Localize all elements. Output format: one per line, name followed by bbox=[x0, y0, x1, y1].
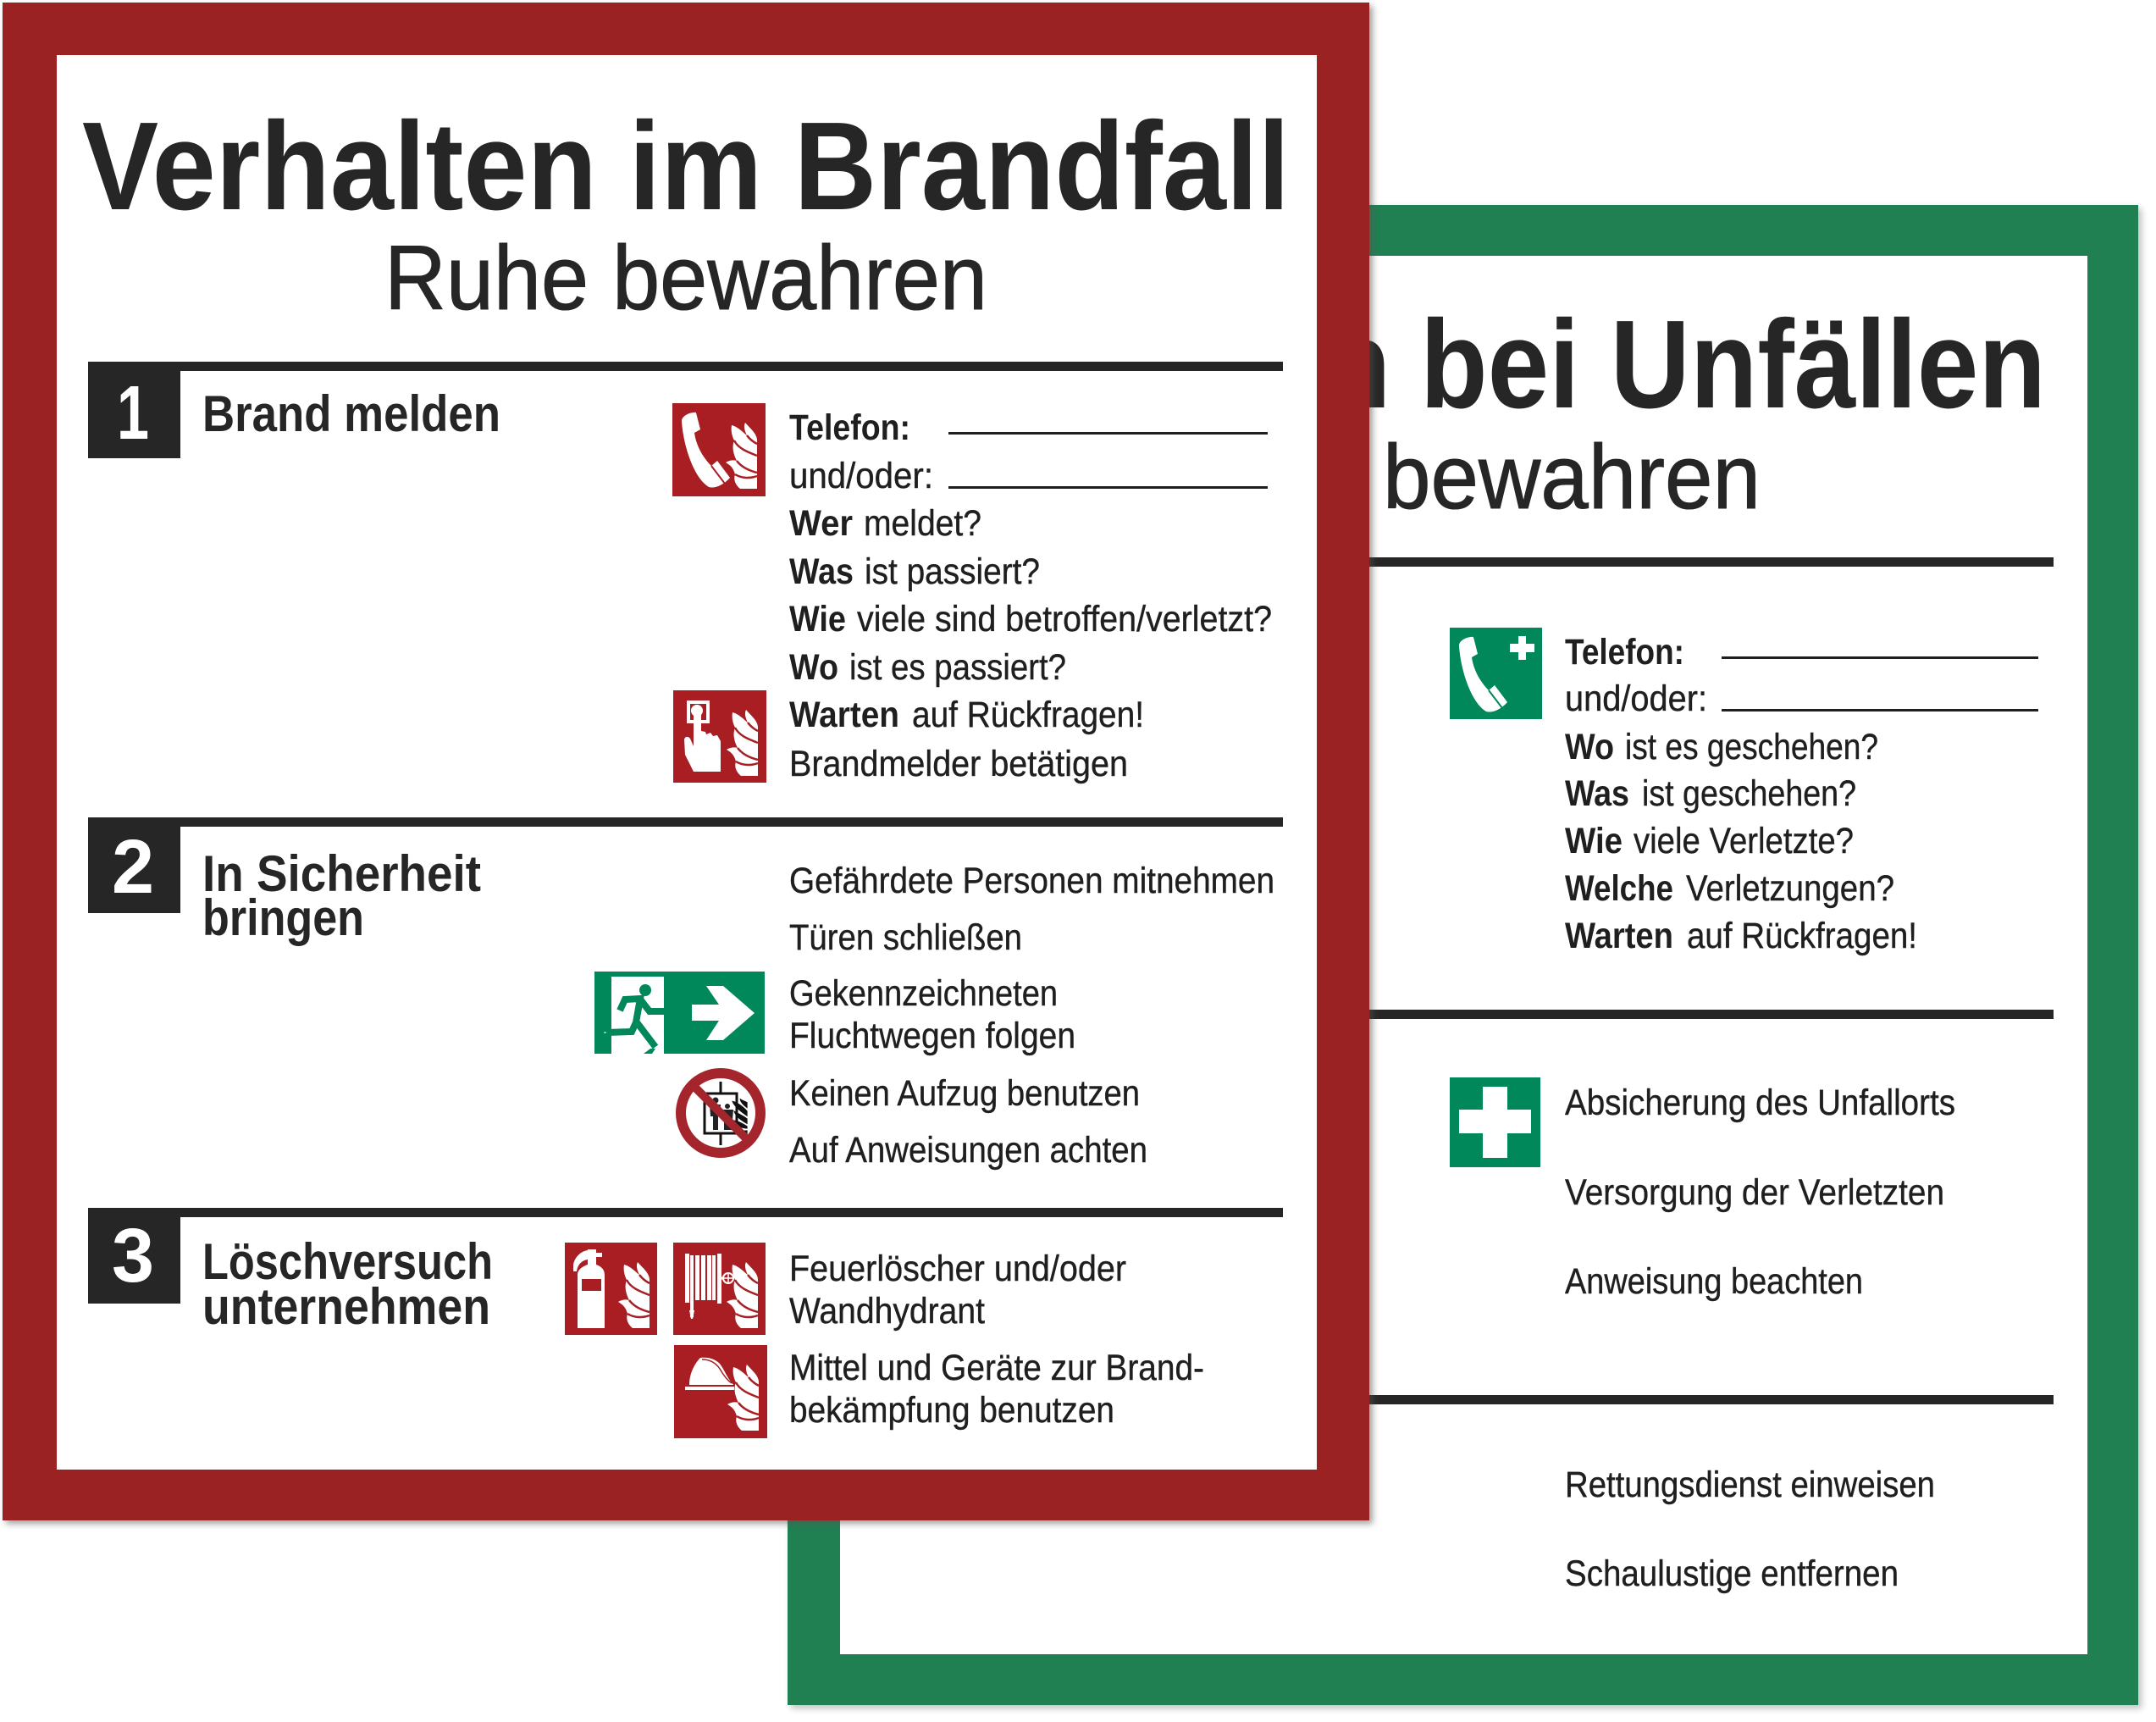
text: Rettungsdienst einweisen: Rettungsdienst einweisen bbox=[1565, 1465, 1935, 1505]
text: Was ist geschehen bbox=[1565, 773, 1856, 814]
number badge 3: 3 bbox=[112, 1214, 154, 1298]
section 2: In Sicherheit bringen bbox=[88, 817, 1283, 1171]
number badge 2 bbox=[88, 817, 180, 913]
heading: Löschversuch unternehmen: Löschversuch bbox=[202, 1233, 493, 1290]
text: Wie viele sind betroffen: Wie bbox=[789, 599, 846, 640]
number badge 2: 2 bbox=[112, 825, 154, 910]
text: Wie viele Verletzte: Wie bbox=[1565, 821, 1623, 861]
text: Gekennzeichneten Fluchtwegen folgen bbox=[789, 973, 1075, 1056]
icon: fire extinguisher bbox=[565, 1243, 657, 1335]
text: Telefon line: Telefon: bbox=[789, 407, 910, 448]
heading: In Sicherheit bringen: bringen bbox=[202, 889, 364, 946]
heading: Brand melden: Brand melden bbox=[202, 385, 500, 442]
icon: do not use lift in case of fire bbox=[681, 1073, 760, 1153]
text: Warten auf Rückfragen bbox=[1565, 916, 1917, 956]
text: Welche Verletzungen: Verletzungen? bbox=[1686, 868, 1894, 909]
text: Was ist geschehen: ist geschehen? bbox=[1642, 773, 1856, 814]
red panel: Verhalten im Brandfall bbox=[3, 3, 1373, 1524]
text: Türen schließen: Türen schließen bbox=[789, 917, 1022, 958]
text: Was ist passiert: ist passiert? bbox=[865, 551, 1040, 592]
text: Wer meldet: meldet? bbox=[864, 503, 981, 544]
text: Brandmelder betätigen: Brandmelder betätigen bbox=[789, 744, 1128, 784]
subtitle: Ruhe bewahren bbox=[384, 226, 987, 329]
text: und/oder line: und/oder: bbox=[1565, 678, 1707, 719]
text: Was ist passiert: Was bbox=[789, 551, 854, 592]
text: Wer meldet: Wer bbox=[789, 503, 853, 544]
text: Wo ist es passiert: Wo bbox=[789, 647, 838, 688]
text: Warten auf Rückfragen: Warten bbox=[1565, 916, 1673, 956]
text: Feuerlöscher und/oder Wandhydrant: Wandhydrant bbox=[789, 1291, 985, 1332]
text: Telefon line: Telefon: bbox=[1565, 632, 1684, 673]
icon: emergency telephone bbox=[1450, 628, 1542, 719]
text: Feuerlöscher und/oder Wandhydrant bbox=[789, 1249, 1126, 1332]
green panel title: bei Unfällen bbox=[1420, 295, 2046, 435]
icon: fire fighting equipment helmet bbox=[674, 1345, 767, 1438]
text: Mittel und Geräte zur Brandbekämpfung benutzen: bekämpfung benutzen bbox=[789, 1390, 1114, 1431]
text: Versorgung der Verletzten: Versorgung der Verletzten bbox=[1565, 1172, 1944, 1213]
section 3: Löschversuch unternehmen bbox=[88, 1208, 1283, 1438]
text: und/oder line bbox=[1565, 678, 2038, 719]
text: Schaulustige entfernen: Schaulustige entfernen bbox=[1565, 1553, 1899, 1594]
icon: fire alarm call point bbox=[673, 690, 766, 783]
text: Warten auf Rückfragen: Warten bbox=[789, 695, 899, 735]
text: Wie viele sind betroffen: viele sind betroffen/verletzt? bbox=[857, 599, 1272, 640]
text: Auf Anweisungen achten: Auf Anweisungen achten bbox=[789, 1130, 1147, 1171]
text: Warten auf Rückfragen: auf Rückfragen! bbox=[1687, 916, 1917, 956]
text: Welche Verletzungen: Welche bbox=[1565, 868, 1673, 909]
text: Gefährdete Personen mitnehmen: Gefährdete Personen mitnehmen bbox=[789, 861, 1274, 901]
text: Wie viele Verletzte bbox=[1565, 821, 1854, 861]
icon: fire hose reel bbox=[673, 1243, 766, 1335]
text: Telefon line bbox=[1565, 632, 2038, 673]
text: Was ist geschehen: Was bbox=[1565, 773, 1629, 814]
text: Welche Verletzungen bbox=[1565, 868, 1894, 909]
number badge 1 bbox=[88, 362, 180, 458]
text: Warten auf Rückfragen: auf Rückfragen! bbox=[912, 695, 1144, 735]
number badge 1: 1 bbox=[117, 371, 149, 456]
text: und/oder line bbox=[789, 456, 1268, 496]
text: Wo ist es passiert: ist es passiert? bbox=[849, 647, 1066, 688]
text: Gekennzeichneten Fluchtwegen folgen: Gekennzeichneten bbox=[789, 973, 1058, 1014]
text: Keinen Aufzug benutzen: Keinen Aufzug benutzen bbox=[789, 1073, 1140, 1114]
icon: first aid cross bbox=[1450, 1077, 1540, 1167]
icon: escape route sign with arrow bbox=[594, 972, 765, 1054]
text: Mittel und Geräte zur Brandbekämpfung benutzen: Mittel und Geräte zur Brand- bbox=[789, 1348, 1204, 1388]
text: und/oder line: und/oder: bbox=[789, 456, 933, 496]
text: Feuerlöscher und/oder Wandhydrant: Feuerlöscher und/oder bbox=[789, 1249, 1126, 1289]
green panel: Verhalten bei Unfällen bbox=[788, 205, 2142, 1708]
green panel subtitle: bewahren bbox=[1383, 425, 1761, 528]
heading: In Sicherheit bringen bbox=[202, 845, 481, 946]
title: Verhalten im Brandfall bbox=[82, 97, 1290, 236]
heading: In Sicherheit bringen: In Sicherheit bbox=[202, 845, 481, 902]
number badge 3 bbox=[88, 1208, 180, 1304]
icon: fire emergency telephone bbox=[672, 403, 766, 496]
text: Gekennzeichneten Fluchtwegen folgen: Fluchtwegen folgen bbox=[789, 1016, 1075, 1056]
heading: Löschversuch unternehmen bbox=[202, 1233, 493, 1335]
text: Wie viele Verletzte: viele Verletzte? bbox=[1634, 821, 1854, 861]
text: Was ist passiert bbox=[789, 551, 1040, 592]
text: Wo ist es geschehen: Wo bbox=[1565, 727, 1614, 767]
text: Absicherung des Unfallorts: Absicherung des Unfallorts bbox=[1565, 1082, 1955, 1123]
text: Wer meldet bbox=[789, 503, 981, 544]
section 1: Brand melden bbox=[88, 362, 1283, 784]
green panel title: n bbox=[1319, 295, 1391, 435]
heading: Löschversuch unternehmen: unternehmen bbox=[202, 1278, 490, 1335]
text: Wo ist es geschehen: ist es geschehen? bbox=[1625, 727, 1878, 767]
text: Warten auf Rückfragen bbox=[789, 695, 1144, 735]
text: Mittel und Geräte zur Brandbekämpfung benutzen bbox=[789, 1348, 1204, 1431]
text: Telefon line bbox=[789, 407, 1268, 448]
text: Anweisung beachten: Anweisung beachten bbox=[1565, 1261, 1863, 1302]
